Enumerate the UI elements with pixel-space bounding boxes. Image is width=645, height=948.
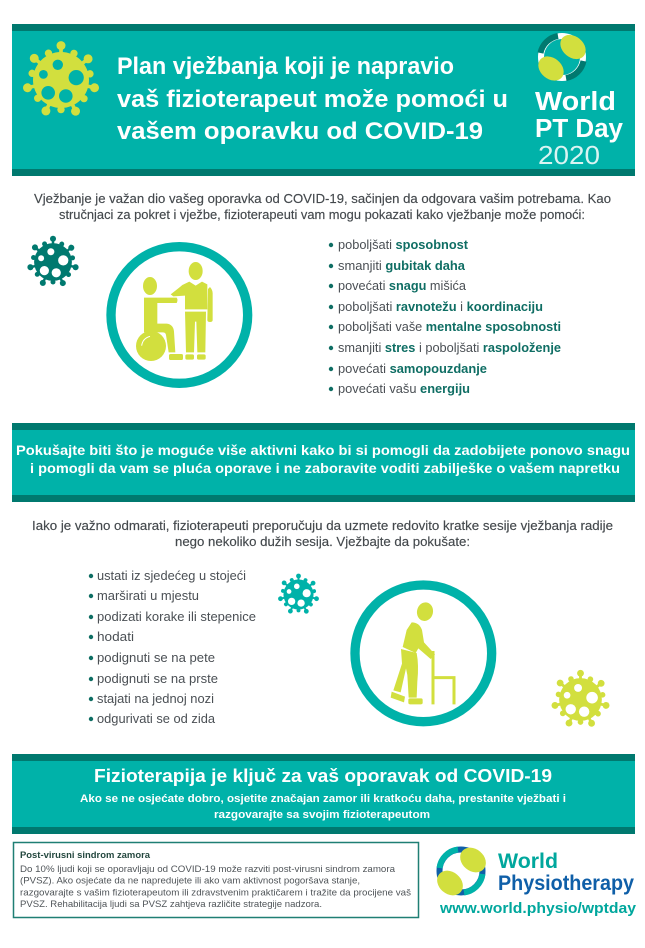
exercise list: hodati <box>97 630 134 644</box>
benefits list: povećati vašu energiju <box>338 382 470 396</box>
callout band: stay active: i pomogli da vam se pluća oporave i ne zaboravite voditi zabilješke o vašem napretku <box>30 460 620 476</box>
intro text: stručnjaci za pokret i vježbe, fizioterapeuti vam mogu pokazati kako vježbanje može pomoći: <box>59 208 585 222</box>
callout band: physiotherapy is key: Fizioterapija je ključ za vaš oporavak od COVID-19 <box>94 766 552 786</box>
benefits list: poboljšati ravnotežu i koordinaciju <box>338 300 543 314</box>
logo: World Physiotherapy: Physiotherapy <box>498 872 634 895</box>
panel: post-viral fatigue syndrome: (PVSZ). Ako osjećate da ne napredujete ili ako vam aktivnost pogoršava stanje, <box>20 876 360 886</box>
logo: World PT Day 2020: World <box>535 88 616 116</box>
logo: World PT Day 2020 <box>534 30 624 170</box>
exercise list: podignuti se na pete <box>97 651 215 665</box>
rest and exercise text: nego nekoliko dužih sesija. Vježbajte da pokušate: <box>175 535 470 549</box>
rest and exercise text <box>32 519 613 549</box>
panel: post-viral fatigue syndrome: razgovarajte s vašim fizioterapeutom ili zdravstvenim praktičarem i tražite da procijene vaš <box>20 888 411 898</box>
intro text: Vježbanje je važan dio vašeg oporavka od COVID-19, sačinjen da odgovara vašim potrebama. Kao <box>34 192 611 206</box>
callout band: physiotherapy is key <box>12 754 635 834</box>
exercise list <box>89 569 256 726</box>
icon: dark green virus <box>27 236 79 287</box>
callout band: physiotherapy is key: razgovarajte sa svojim fizioterapeutom <box>214 809 430 821</box>
panel: post-viral fatigue syndrome: Post-virusni sindrom zamora <box>20 850 151 861</box>
callout band: stay active: Pokušajte biti što je moguće više aktivni kako bi si pomogli da zadobijete ponovo snagu <box>16 442 630 458</box>
exercise list: ustati iz sjedećeg u stojeći <box>97 569 246 583</box>
title: Plan vježbanja koji je napravio <box>117 53 454 80</box>
icon: person with walker in circle <box>355 585 492 722</box>
intro text <box>34 192 611 222</box>
logo: World PT Day 2020: PT Day <box>535 115 624 143</box>
benefits list: smanjiti stres i poboljšati raspoloženje <box>338 341 561 355</box>
benefits list: poboljšati vaše mentalne sposobnosti <box>338 320 561 334</box>
benefits list: smanjiti gubitak daha <box>338 259 466 273</box>
panel: post-viral fatigue syndrome: Do 10% ljudi koji se oporavljaju od COVID-19 može razviti post-virusni sindrom zamora <box>20 864 396 875</box>
logo: World PT Day 2020: 2020 <box>538 140 600 170</box>
logo: World Physiotherapy <box>432 843 636 917</box>
exercise list: stajati na jednoj nozi <box>97 692 214 706</box>
title <box>117 53 508 145</box>
benefits list: poboljšati sposobnost <box>338 238 469 252</box>
panel: post-viral fatigue syndrome: PVSZ. Rehabilitacija ljudi sa PVSZ zahtjeva različite strategije nadzora. <box>20 899 322 910</box>
title: vašem oporavku od COVID-19 <box>117 118 483 145</box>
rest and exercise text: Iako je važno odmarati, fizioterapeuti preporučuju da uzmete redovito kratke sesije vježbanja radije <box>32 519 613 533</box>
exercise list: odgurivati se od zida <box>97 712 215 726</box>
callout band: stay active <box>12 423 635 502</box>
icon: yellow virus small <box>551 670 610 728</box>
icon: teal virus <box>278 574 319 614</box>
icon: physiotherapist with patient in circle <box>111 247 248 383</box>
exercise list: marširati u mjestu <box>97 589 199 603</box>
benefits list: povećati snagu mišića <box>338 279 466 293</box>
exercise list: podignuti se na prste <box>97 672 218 686</box>
benefits list <box>329 238 561 396</box>
callout band: physiotherapy is key: Ako se ne osjećate dobro, osjetite značajan zamor ili kratkoću daha, prestanite vježbati i <box>80 793 566 805</box>
exercise list: podizati korake ili stepenice <box>97 610 256 624</box>
logo: World Physiotherapy: World <box>498 850 558 873</box>
website url: www.world.physio/wptday <box>439 901 636 917</box>
header banner <box>12 24 635 176</box>
benefits list: povećati samopouzdanje <box>338 362 487 376</box>
panel: post-viral fatigue syndrome <box>14 842 418 918</box>
icon: yellow virus <box>22 41 100 117</box>
title: vaš fizioterapeut može pomoći u <box>117 86 508 113</box>
